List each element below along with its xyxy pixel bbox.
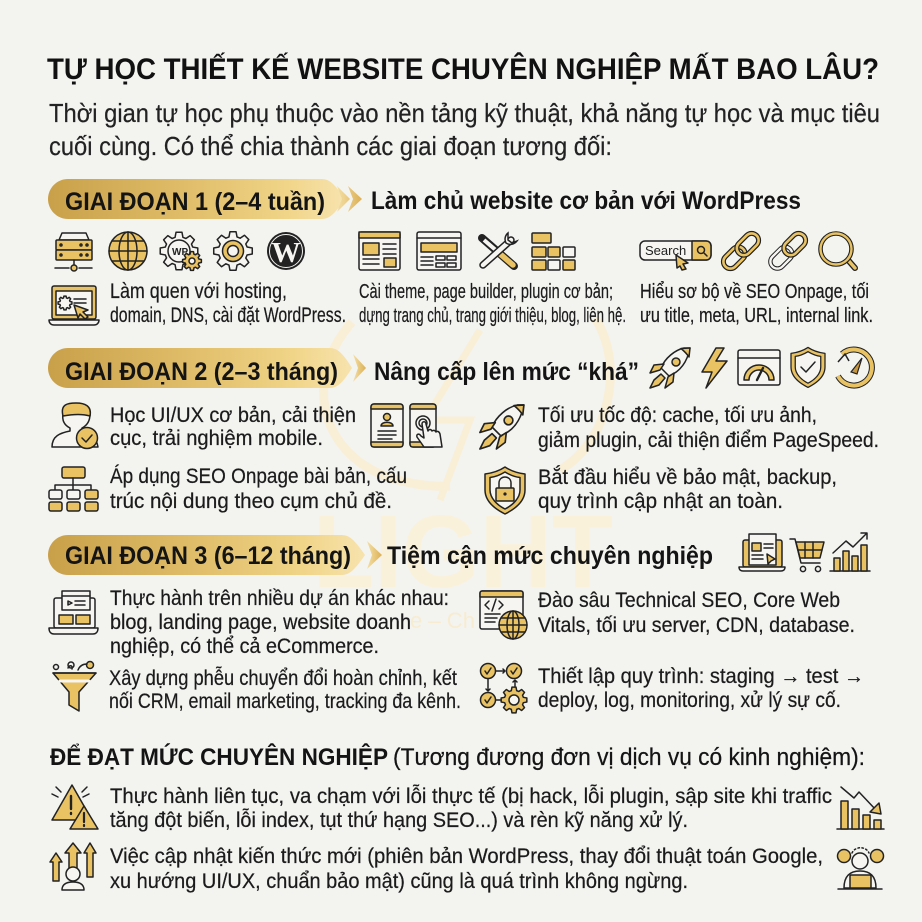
icon: WP gear: WP xyxy=(172,247,188,258)
panel: giai đoạn 3 xyxy=(48,533,870,713)
text: technical SEO: Đào sâu Technical SEO, Core Web xyxy=(538,589,840,612)
watermark: logo xyxy=(313,318,613,609)
icon: window layout xyxy=(359,232,400,270)
text: thực hành liên tục xyxy=(110,785,832,832)
text: SEO xyxy=(640,281,873,327)
icon: warning xyxy=(52,785,98,829)
icon: tablet xyxy=(371,404,403,447)
text: thực hành: blog, landing page, website doanh xyxy=(110,611,411,634)
text: cập nhật: xu hướng UI/UX, chuẩn bảo mật) cũng là quá trình không ngừng. xyxy=(110,870,688,893)
panel: giai đoạn 1 xyxy=(48,179,873,327)
icon: search bar xyxy=(640,241,711,270)
icon: rocket xyxy=(650,348,690,388)
text: bảo mật: quy trình cập nhật an toàn. xyxy=(538,490,783,513)
icon: WordPress logo: W xyxy=(272,237,300,269)
text: thực hành: Thực hành trên nhiều dự án khác nhau: xyxy=(110,587,449,610)
text: tốc độ xyxy=(538,404,879,452)
text: quy trình: deploy, log, monitoring, xử lý sự cố. xyxy=(538,689,841,712)
banner: giai đoạn 2 xyxy=(48,348,366,388)
text: SEO onpage xyxy=(110,465,407,513)
icon: server xyxy=(55,233,92,271)
icon: shield lock xyxy=(485,467,525,514)
heading: chuyên nghiệp: ĐỂ ĐẠT MỨC CHUYÊN NGHIỆP xyxy=(50,743,388,771)
icon: search bar: Search xyxy=(645,243,686,258)
text: hosting xyxy=(110,280,346,327)
icon: laptop settings xyxy=(49,286,99,325)
text: quy trình xyxy=(538,665,864,712)
text: cập nhật xyxy=(110,845,823,893)
text: hosting: Làm quen với hosting, xyxy=(110,280,287,303)
icon: user check xyxy=(52,403,98,448)
text: SEO onpage: Áp dụng SEO Onpage bài bản, cấu xyxy=(110,465,407,488)
text: phễu xyxy=(109,667,461,713)
text: theme xyxy=(359,281,626,327)
text: tốc độ: giảm plugin, cải thiện điểm PageSpeed. xyxy=(538,429,879,452)
text: thực hành liên tục: tăng đột biến, lỗi index, tụt thứ hạng SEO...) và rèn kỹ năng xử lý. xyxy=(110,809,688,832)
intro text: cuối cùng. Có thể chia thành các giai đoạn tương đối: xyxy=(49,131,612,161)
icon: rocket large xyxy=(480,405,524,449)
heading: giai đoạn 3: Tiệm cận mức chuyên nghiệp xyxy=(387,542,713,570)
text: bảo mật: Bắt đầu hiểu về bảo mật, backup, xyxy=(538,466,837,489)
text: UI UX xyxy=(110,404,356,450)
text: thực hành xyxy=(110,587,449,658)
text: SEO onpage: trúc nội dung theo cụm chủ đề. xyxy=(110,490,392,513)
panel: để đạt mức chuyên nghiệp xyxy=(50,743,884,893)
banner: giai đoạn 3: GIAI ĐOẠN 3 (6–12 tháng) xyxy=(65,542,351,570)
text: thực hành: nghiệp, có thể cả eCommerce. xyxy=(110,635,379,658)
heading: giai đoạn 1: Làm chủ website cơ bản với WordPress xyxy=(371,187,801,215)
text: bảo mật xyxy=(538,466,837,513)
icon: shield check xyxy=(791,347,825,387)
text: hosting: domain, DNS, cài đặt WordPress. xyxy=(110,304,346,327)
text: tốc độ: Tối ưu tốc độ: cache, tối ưu ảnh, xyxy=(538,404,817,427)
text: phễu: Xây dựng phễu chuyển đổi hoàn chỉnh, kết xyxy=(109,667,457,690)
icon: clock gauge xyxy=(838,350,872,386)
icon: window grid xyxy=(417,232,461,270)
text: quy trình: Thiết lập quy trình: staging → test → xyxy=(538,665,864,688)
text: theme: Cài theme, page builder, plugin cơ bản; xyxy=(359,281,613,303)
title: TỰ HỌC THIẾT KẾ WEBSITE CHUYÊN NGHIỆP MẤT BAO LÂU? xyxy=(47,52,879,86)
icon: speed window xyxy=(738,350,780,385)
intro text xyxy=(49,98,880,161)
icon: person arrows xyxy=(50,843,96,890)
icon: globe xyxy=(109,232,147,270)
text: theme: dựng trang chủ, trang giới thiệu, blog, liên hệ. xyxy=(359,305,626,327)
icon: sitemap xyxy=(49,467,98,511)
icon: chain silver xyxy=(767,230,809,272)
watermark: brand text: LIGHT xyxy=(313,494,613,609)
icon: phone touch xyxy=(410,404,442,447)
icon: lightning bolt xyxy=(702,348,727,388)
text: SEO: Hiểu sơ bộ về SEO Onpage, tối xyxy=(640,281,869,303)
icon: growth chart xyxy=(830,533,870,571)
banner: giai đoạn 3 xyxy=(48,535,382,575)
icon: WP gear xyxy=(160,232,201,270)
banner: giai đoạn 2: GIAI ĐOẠN 2 (2–3 tháng) xyxy=(65,358,338,386)
icon: process flow xyxy=(480,664,527,713)
text: UI UX: Học UI/UX cơ bản, cải thiện xyxy=(110,404,356,427)
icon: laptop projects xyxy=(49,591,98,634)
watermark: tagline: e – Ch xyxy=(410,608,475,633)
icon: person laptop xyxy=(838,848,884,889)
icon: WordPress logo xyxy=(267,232,305,270)
text: phễu: nối CRM, email marketing, tracking đa kênh. xyxy=(109,690,461,713)
icon: block grid xyxy=(532,233,575,270)
icon: funnel xyxy=(53,662,96,711)
banner: giai đoạn 1 xyxy=(48,179,362,219)
icon: tools xyxy=(482,233,517,266)
icon: magnifier xyxy=(820,234,855,268)
text: thực hành liên tục: Thực hành liên tục, va chạm với lỗi thực tế (bị hack, lỗi plugin, sập site khi traffic xyxy=(110,785,832,808)
panel: giai đoạn 2 xyxy=(48,347,879,514)
heading: giai đoạn 2: Nâng cấp lên mức “khá” xyxy=(374,358,639,386)
text: SEO: ưu title, meta, URL, internal link. xyxy=(640,305,873,327)
icon: code window globe xyxy=(480,591,527,639)
text: UI UX: cục, trải nghiệm mobile. xyxy=(110,427,323,450)
text: technical SEO: Vitals, tối ưu server, CDN, database. xyxy=(538,614,855,637)
banner: giai đoạn 1: GIAI ĐOẠN 1 (2–4 tuần) xyxy=(65,188,325,216)
text: technical SEO xyxy=(538,589,855,637)
icon: gear xyxy=(214,232,252,270)
heading: chuyên nghiệp: (Tương đương đơn vị dịch vụ có kinh nghiệm): xyxy=(393,744,865,771)
icon: falling chart xyxy=(837,787,884,829)
text: cập nhật: Việc cập nhật kiến thức mới (phiên bản WordPress, thay đổi thuật toán Google, xyxy=(110,845,823,868)
icon: chain gold xyxy=(720,230,762,272)
icon: shopping cart xyxy=(790,539,824,572)
icon: laptop document xyxy=(739,534,785,571)
